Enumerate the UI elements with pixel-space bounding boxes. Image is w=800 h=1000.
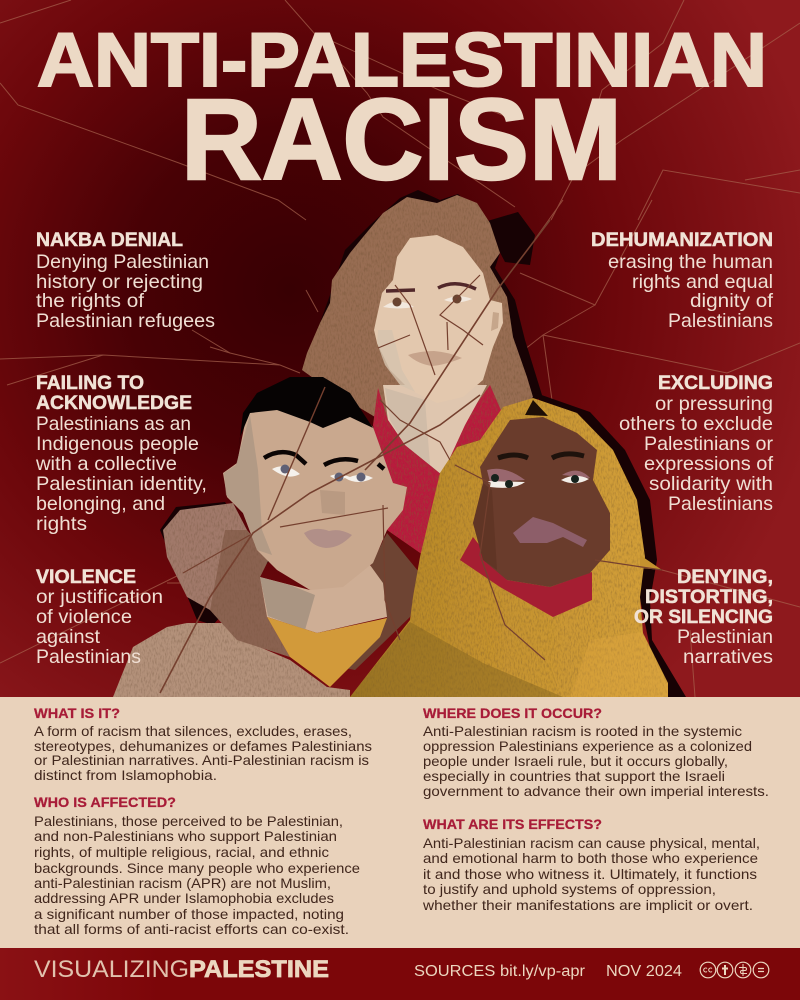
where does it occur: [423, 706, 769, 799]
eye shadow: [487, 469, 590, 482]
title: RACISM: [181, 76, 622, 204]
who is affected: backgrounds. Since many people who experience: [34, 860, 360, 876]
logo: visualizing palestine: PALESTINE: [189, 956, 329, 983]
collar left: [163, 503, 290, 657]
sources: SOURCES bit.ly/vp-apr: [414, 963, 585, 980]
title: [37, 18, 767, 204]
label: excluding: or pressuring: [655, 393, 773, 415]
who is affected: that all forms of anti-racist efforts can co-exist.: [34, 921, 349, 937]
label: violence: Palestinians: [36, 646, 141, 668]
who is affected: a significant number of those impacted, noting: [34, 906, 344, 922]
label: failing to acknowledge: FAILING TO: [36, 373, 144, 394]
label: dehumanization: erasing the human: [608, 251, 773, 273]
where does it occur: people under Israeli rule, but it occurs globally,: [423, 753, 728, 769]
eyes: [488, 476, 589, 488]
collar right: [290, 533, 423, 670]
label: nakba denial: the rights of: [36, 290, 145, 312]
label: nakba denial: NAKBA DENIAL: [36, 230, 183, 251]
label: excluding: [619, 373, 774, 515]
who is affected: addressing APR under Islamophobia excludes: [34, 890, 334, 906]
background cracks: [0, 0, 800, 697]
label: denying, distorting, or silencing: Palestinian: [677, 626, 773, 648]
what are its effects: whether their manifestations are implicit or overt.: [422, 897, 753, 913]
face: [223, 390, 407, 590]
where does it occur: especially in countries that support the Israeli: [423, 768, 725, 784]
label: violence: VIOLENCE: [36, 567, 136, 588]
cracks over portraits: [160, 220, 662, 693]
who is affected: rights, of multiple religious, racial, and ethnic: [34, 844, 329, 860]
label: excluding: EXCLUDING: [658, 373, 773, 394]
label: failing to acknowledge: rights: [36, 513, 87, 535]
label: failing to acknowledge: Palestinians as an: [36, 413, 191, 435]
date: NOV 2024: [606, 963, 682, 980]
label: failing to acknowledge: Indigenous people: [36, 433, 199, 455]
lips: [304, 529, 352, 548]
what is it: WHAT IS IT?: [34, 706, 120, 721]
shirt: [373, 385, 503, 555]
what are its effects: it and those who witness it. Ultimately, it functions: [423, 866, 757, 882]
portrait: man with short black hair: [113, 377, 423, 697]
label: failing to acknowledge: belonging, and: [36, 493, 165, 515]
icons: creative commons licence: [700, 962, 769, 978]
label: denying, distorting, or silencing: [634, 567, 773, 668]
label: dehumanization: Palestinians: [668, 310, 773, 332]
lips: [408, 351, 462, 366]
shoulder: [113, 623, 350, 697]
label: nakba denial: [36, 230, 215, 332]
who is affected: and non-Palestinians who support Palestinian: [34, 828, 337, 844]
portrait: woman with long hair: [302, 190, 542, 555]
label: excluding: Palestinians or: [644, 433, 774, 455]
where does it occur: WHERE DOES IT OCCUR?: [423, 706, 602, 721]
face: [473, 417, 610, 587]
label: dehumanization: [591, 230, 774, 332]
label: violence: or justification: [36, 586, 163, 608]
label: failing to acknowledge: Palestinian identity,: [36, 473, 207, 495]
label: violence: [36, 567, 163, 668]
logo: visualizing palestine: VISUALIZING: [34, 956, 189, 983]
what are its effects: [422, 817, 760, 913]
where does it occur: oppression Palestinians experience as a colonized: [423, 738, 752, 754]
label: excluding: Palestinians: [668, 493, 773, 515]
label: failing to acknowledge: [35, 373, 207, 535]
label: dehumanization: rights and equal: [632, 271, 773, 293]
who is affected: anti-Palestinian racism (APR) are not Muslim,: [34, 875, 331, 891]
label: excluding: others to exclude: [619, 413, 773, 435]
label: excluding: solidarity with: [649, 473, 773, 495]
label: excluding: expressions of: [644, 453, 774, 475]
footer: [0, 948, 800, 1000]
label: denying, distorting, or silencing: DISTORTING,: [645, 587, 773, 608]
label: denying, distorting, or silencing: narratives: [683, 646, 773, 668]
label: denying, distorting, or silencing: DENYING,: [677, 567, 773, 588]
label: nakba denial: Palestinian refugees: [36, 310, 215, 332]
logo: visualizing palestine: [34, 956, 329, 983]
neck: [260, 565, 387, 633]
eyes: [272, 466, 373, 482]
yellow shirt: [267, 617, 387, 687]
label: failing to acknowledge: with a collective: [35, 453, 177, 475]
what is it: [34, 706, 372, 783]
eyes and brows: [386, 284, 476, 291]
brows: [264, 452, 384, 469]
spike of scarf: [640, 555, 662, 570]
who is affected: Palestinians, those perceived to be Palestinian,: [34, 813, 343, 829]
who is affected: WHO IS AFFECTED?: [34, 795, 176, 810]
title: ANTI-PALESTINIAN: [37, 18, 767, 103]
neck: [383, 385, 487, 475]
what are its effects: WHAT ARE ITS EFFECTS?: [423, 817, 602, 832]
what is it: stereotypes, dehumanizes or defames Palestinians: [34, 738, 372, 754]
lips: [513, 517, 587, 547]
label: dehumanization: dignity of: [690, 290, 774, 312]
panel: explanations: [0, 697, 800, 949]
label: violence: against: [36, 626, 101, 648]
what are its effects: and emotional harm to both those who experience: [423, 850, 758, 866]
brows: [498, 454, 584, 458]
where does it occur: government to advance their own imperial interests.: [423, 783, 769, 799]
label: denying, distorting, or silencing: OR SILENCING: [634, 607, 773, 628]
where does it occur: Anti-Palestinian racism is rooted in the systemic: [423, 723, 742, 739]
background: [0, 0, 800, 698]
what is it: or Palestinian narratives. Anti-Palestinian racism is: [34, 752, 369, 768]
who is affected: [34, 795, 360, 937]
label: dehumanization: DEHUMANIZATION: [591, 230, 773, 251]
label: nakba denial: Denying Palestinian: [36, 251, 209, 273]
red collar: [460, 537, 592, 617]
label: failing to acknowledge: ACKNOWLEDGE: [36, 393, 192, 414]
what is it: A form of racism that silences, excludes, erases,: [34, 723, 352, 739]
illustration: three portraits: [113, 190, 686, 697]
hair: [237, 377, 373, 463]
what are its effects: to justify and uphold systems of oppression,: [423, 881, 716, 897]
what is it: distinct from Islamophobia.: [34, 767, 217, 783]
label: violence: of violence: [36, 606, 132, 628]
face: [374, 235, 503, 403]
label: nakba denial: history or rejecting: [36, 271, 203, 293]
what are its effects: Anti-Palestinian racism can cause physical, mental,: [423, 835, 760, 851]
scarf parting: [525, 400, 548, 416]
portrait: woman in yellow headscarf: [350, 392, 686, 697]
